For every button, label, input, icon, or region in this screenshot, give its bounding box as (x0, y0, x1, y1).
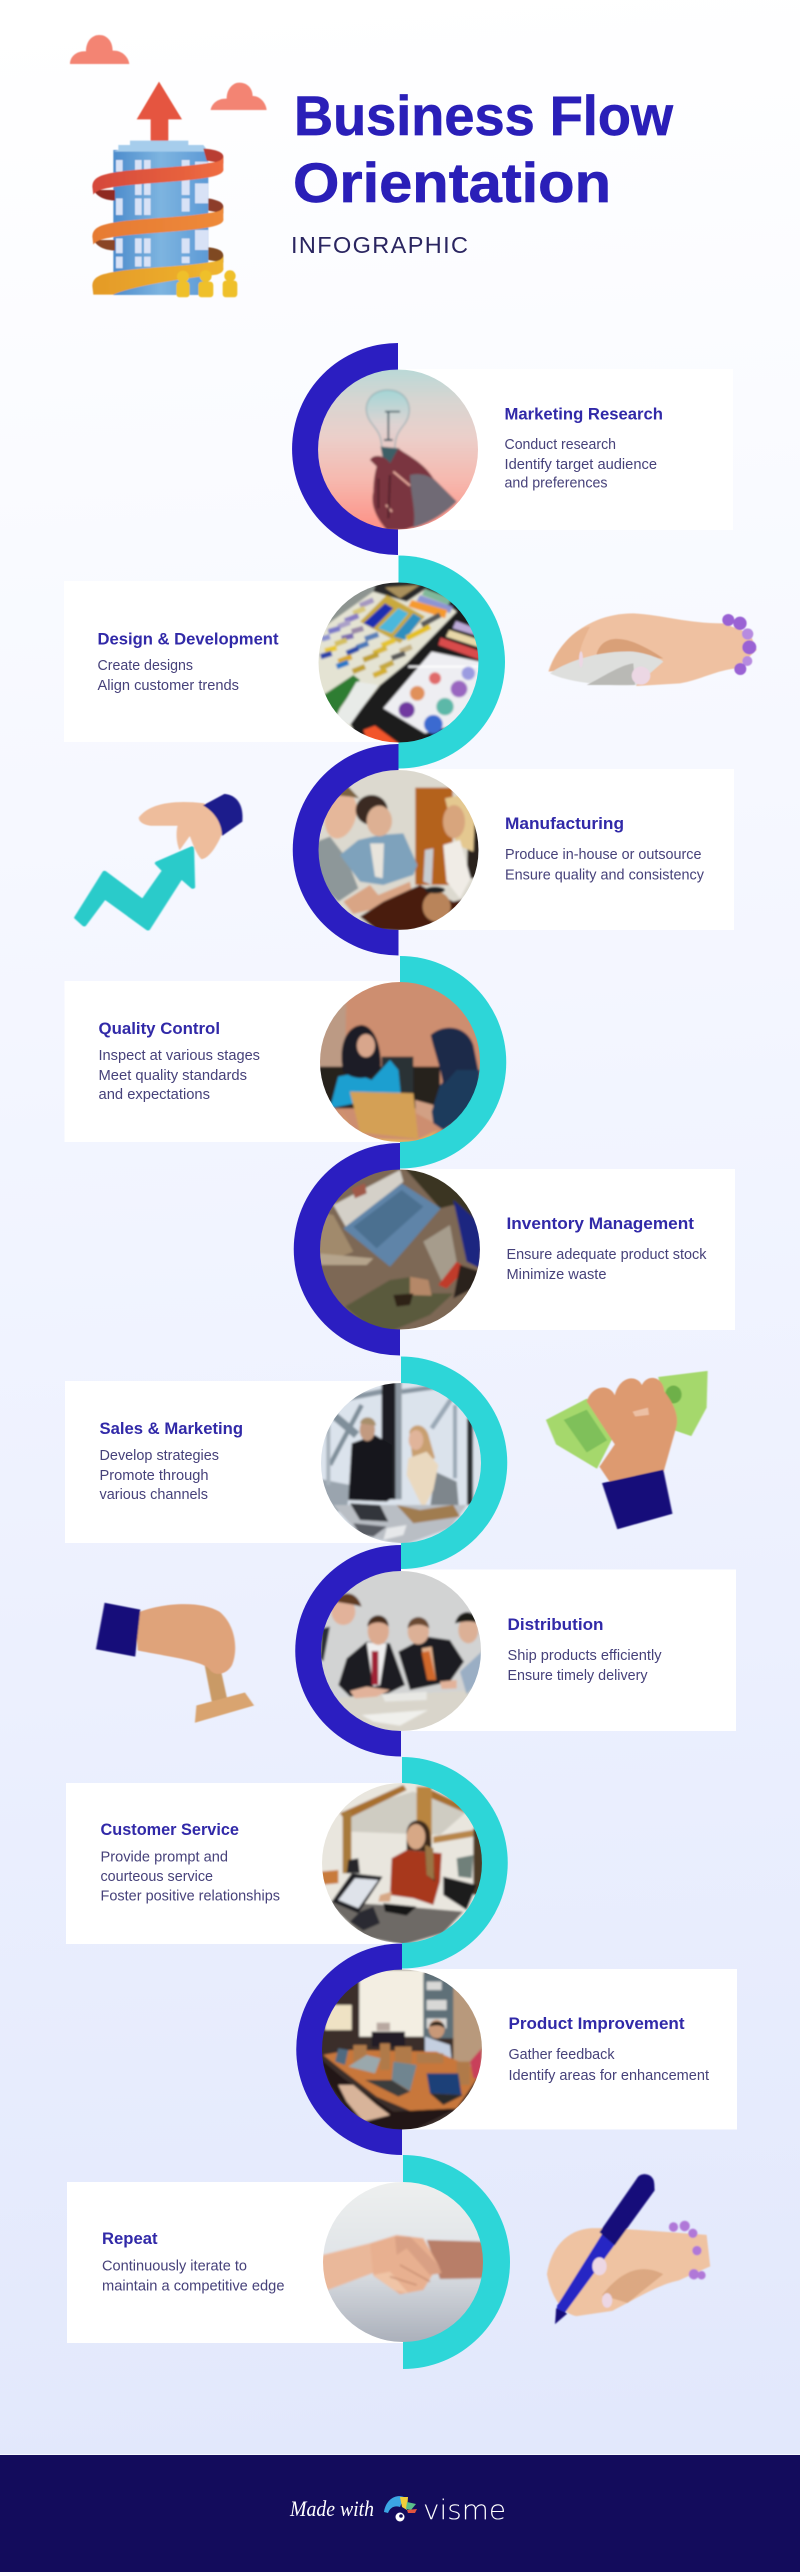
photo: colour swatches and tablet (317, 581, 480, 744)
description: courteous service (100, 1869, 213, 1885)
card (402, 1969, 737, 2130)
description (504, 437, 657, 492)
description: Inspect at various stages (98, 1048, 260, 1064)
card (398, 369, 733, 530)
card (64, 981, 400, 1142)
description (100, 1850, 280, 1904)
description: Identify target audience (504, 457, 657, 473)
description (506, 1247, 707, 1283)
title (293, 84, 673, 214)
icon: red up arrow (137, 82, 182, 142)
card (65, 1381, 401, 1543)
panel: Quality Control (64, 956, 506, 1168)
photo: meeting room with laptops (317, 1967, 483, 2132)
icon: hand holding pen (547, 2174, 710, 2324)
icon: right cloud (211, 83, 267, 110)
icon: tower (113, 141, 208, 295)
heading: Quality Control (98, 1019, 220, 1038)
heading: Customer Service (100, 1820, 239, 1839)
arc (295, 1545, 401, 1756)
description: Conduct research (504, 437, 616, 453)
arc (403, 2155, 510, 2369)
visme wordmark: visme (423, 2495, 506, 2526)
heading: Sales & Marketing (100, 1419, 243, 1438)
description: Promote through (100, 1468, 208, 1484)
heading: Repeat (102, 2229, 158, 2248)
card (401, 1570, 736, 1731)
icon: yellow figures (176, 270, 237, 297)
photo: businessmen reviewing papers (317, 1568, 483, 1733)
description (508, 2047, 709, 2084)
description: Continuously iterate to (102, 2258, 247, 2274)
arc (294, 1143, 400, 1356)
heading: Distribution (508, 1615, 604, 1634)
panel: Customer Service (66, 1757, 508, 1968)
icon: hand with stamp (96, 1603, 254, 1723)
photo: light bulb in hand (317, 368, 480, 532)
card (398, 769, 734, 930)
description: various channels (100, 1487, 208, 1503)
description: Develop strategies (100, 1448, 219, 1464)
description: Meet quality standards (98, 1068, 247, 1084)
description: Ensure timely delivery (508, 1668, 648, 1684)
photo: laptop from above (317, 1167, 483, 1332)
description (505, 847, 705, 884)
photo: team at table (317, 768, 480, 932)
card (400, 1169, 735, 1330)
icon: fist holding money (546, 1371, 708, 1529)
panel: Product Improvement (296, 1944, 737, 2155)
icon: hand pulling teal growth arrow (77, 794, 243, 929)
description: Foster positive relationships (100, 1888, 280, 1904)
arc (398, 556, 505, 768)
subtitle: INFOGRAPHIC (291, 232, 468, 258)
description: Provide prompt and (100, 1850, 228, 1866)
made with label: Made with (289, 2496, 374, 2521)
description: Minimize waste (506, 1267, 606, 1283)
description (100, 1448, 219, 1503)
photo: cashier at tablet (317, 1781, 483, 1946)
description: Identify areas for enhancement (508, 2068, 709, 2084)
description: Align customer trends (98, 678, 239, 694)
arc (401, 1356, 507, 1569)
icon: spiral ribbons (92, 149, 223, 295)
icon: hand on mouse (548, 613, 757, 686)
card (64, 581, 399, 742)
heading: Product Improvement (508, 2014, 685, 2033)
title: Orientation (293, 151, 611, 214)
photo: colleagues at glass office (317, 1381, 483, 1546)
description: Ensure adequate product stock (506, 1247, 707, 1263)
card (66, 1783, 402, 1944)
panel: Sales & Marketing (65, 1356, 507, 1569)
arc (402, 1757, 508, 1968)
description (98, 658, 239, 694)
description: and preferences (504, 476, 608, 492)
panel: Distribution (295, 1545, 736, 1756)
arc (293, 744, 398, 956)
description: Produce in-house or outsource (505, 847, 702, 863)
icon: left cloud (70, 35, 129, 64)
arc (400, 956, 506, 1168)
photo: handshake (317, 2180, 485, 2345)
panel: Repeat (67, 2155, 510, 2369)
description: maintain a competitive edge (102, 2278, 284, 2294)
panel: Design & Development (64, 556, 505, 768)
description: Ensure quality and consistency (505, 868, 705, 884)
title: Business Flow (294, 84, 673, 147)
heading: Marketing Research (504, 404, 663, 424)
panel: Marketing Research (292, 343, 662, 555)
description (102, 2258, 284, 2294)
card (67, 2182, 403, 2343)
description: Gather feedback (508, 2047, 615, 2063)
arc (292, 343, 398, 555)
heading: Design & Development (98, 630, 279, 648)
arc (296, 1944, 402, 2155)
heading: Manufacturing (505, 814, 624, 833)
description: Create designs (98, 658, 193, 674)
description (508, 1648, 662, 1684)
icon: visme logo (384, 2496, 417, 2522)
description: Ship products efficiently (508, 1648, 662, 1664)
panel: Manufacturing (293, 744, 734, 956)
panel: Inventory Management (294, 1143, 735, 1356)
header illustration: tower with spiral ribbons (70, 35, 267, 297)
heading: Inventory Management (506, 1214, 694, 1233)
description (98, 1048, 260, 1103)
description: and expectations (98, 1087, 210, 1103)
photo: two women with laptop (317, 980, 483, 1145)
footer bar (0, 2454, 800, 2572)
